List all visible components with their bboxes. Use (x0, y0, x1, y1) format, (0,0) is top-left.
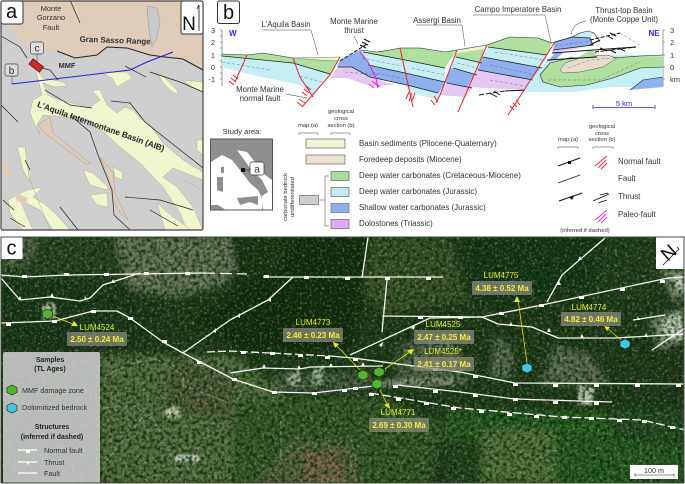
label: Thrust-top Basin: Thrust-top Basin (595, 6, 653, 15)
faults (1, 0, 203, 230)
basin sediments (8, 68, 203, 230)
fault labels: Paleo-fault (618, 210, 657, 219)
north arrow c (656, 237, 684, 269)
fault tick marks (6, 256, 681, 429)
sample LUM4525: 2.47 ± 0.25 Ma (417, 333, 471, 342)
north arrow a: N (182, 14, 196, 35)
surface and contact lines (222, 31, 663, 93)
lithology labels: Deep water carbonates (Jurassic) (359, 187, 477, 196)
sample LUM4525* (414, 347, 474, 371)
label: Assergi Basin: Assergi Basin (413, 16, 461, 25)
sample LUM4775: 4.38 ± 0.52 Ma (475, 284, 529, 293)
left axis: 3 (211, 26, 215, 35)
label: Campo Imperatore Basin (473, 5, 561, 42)
dolomitized bedrock key: Dolomitized bedrock (22, 403, 88, 412)
middle block (456, 46, 485, 55)
fold block (523, 55, 663, 92)
label: Monte Marine normal fault: normal fault (240, 94, 281, 103)
label b (218, 1, 240, 24)
panel: c aerial image (0, 236, 685, 484)
right axis: km (670, 75, 680, 84)
sample LUM4524: 2.50 ± 0.24 Ma (70, 335, 124, 344)
inset label a: a (254, 164, 260, 176)
legend: faults (558, 124, 661, 234)
label: Campo Imperatore Basin: Campo Imperatore Basin (475, 5, 561, 14)
MMF damage zone key: MMF damage zone (22, 386, 84, 395)
direction labels: W (229, 29, 237, 38)
legend: faults: cross (595, 131, 609, 137)
left axis: 0 (211, 63, 215, 72)
fault lines (1, 237, 685, 430)
sample LUM4774: 4.82 ± 0.46 Ma (564, 315, 618, 324)
study zone c (29, 59, 43, 72)
left axis: -1 (208, 75, 215, 84)
label: Monte Marine thrust (330, 17, 378, 44)
label: Assergi Basin (413, 16, 465, 46)
carbonate bedrock label: undifferentiated (290, 177, 296, 217)
samples heading: (TL Ages) (34, 366, 66, 373)
sample LUM4773 (283, 318, 368, 380)
scale bar 5 km: 5 km (616, 99, 632, 108)
label box b: b (9, 66, 15, 77)
study area map (210, 139, 272, 210)
fault labels: Fault (618, 174, 636, 183)
label b: b (223, 2, 234, 24)
legend: faults: section (b) (588, 137, 616, 143)
legend: faults: geological (589, 124, 615, 130)
fault key: Fault (44, 469, 60, 478)
structures heading: (inferred if dashed) (21, 434, 83, 441)
label: Monte Gorzano Fault: Fault (43, 23, 59, 32)
panel: b cross section (208, 1, 680, 115)
normal faults red (229, 42, 555, 115)
label: Thrust-top Basin: (Monte Coppe Unit) (590, 15, 658, 24)
panel: a map (1, 0, 203, 230)
label: Monte Gorzano Fault: Gorzano (37, 13, 65, 22)
aerial photo background (0, 236, 685, 484)
foredeep and range area (1, 1, 203, 70)
symbol: fault (558, 175, 580, 183)
right axis: 2 (670, 38, 674, 47)
sample LUM4524 (42, 309, 127, 346)
right axis: 3 (670, 26, 674, 35)
column headers (298, 109, 355, 135)
left axis (208, 26, 222, 86)
column headers: geological (328, 109, 354, 115)
label c (1, 237, 22, 260)
study area label: Study area: (223, 127, 261, 136)
scale bar 100 m: 100 m (644, 466, 664, 475)
sample LUM4525 (374, 320, 474, 377)
dashed bedding (222, 33, 640, 86)
sample LUM4774: LUM4774 (572, 303, 607, 312)
scale bar 5 km (593, 99, 655, 109)
column headers: cross (334, 116, 348, 122)
column headers: map (a) (298, 123, 318, 129)
label: L'Aquila Basin (261, 20, 318, 55)
label: L'Aquila Basin: L'Aquila Basin (261, 20, 311, 29)
label: Monte Gorzano Fault: Monte (41, 4, 61, 13)
legend: lithology (283, 109, 521, 228)
symbol: paleo-fault (595, 210, 607, 223)
thrust faults black (340, 33, 636, 97)
paleo-fault (360, 52, 380, 88)
cross section trace (12, 52, 173, 84)
label: AIB: L'Aquila Intermontane Basin (AIB) (36, 99, 166, 153)
sample LUM4771: 2.69 ± 0.30 Ma (372, 421, 426, 430)
lithology labels: Deep water carbonates (Cretaceous-Miocene) (359, 171, 521, 180)
label: Gran Sasso Range: Gran Sasso Range (79, 35, 151, 46)
right axis: 1 (670, 51, 674, 60)
legend: faults: map (a) (558, 137, 578, 143)
lithology labels: Shallow water carbonates (Jurassic) (359, 203, 486, 212)
label a: a (6, 1, 18, 23)
sample LUM4775 (472, 271, 532, 373)
thrust key: Thrust (44, 458, 64, 467)
east tilted block (487, 37, 552, 55)
right axis: 0 (670, 63, 674, 72)
lithology labels: Dolostones (Triassic) (359, 219, 433, 228)
sample LUM4525*: 2.41 ± 0.17 Ma (417, 360, 471, 369)
symbol: thrust (559, 193, 609, 203)
label: Monte Marine thrust: Monte Marine (330, 17, 378, 26)
sample LUM4524: LUM4524 (80, 323, 115, 332)
structures heading: Structures (35, 424, 69, 431)
samples heading: Samples (36, 357, 64, 364)
normal fault key: Normal fault (44, 446, 83, 455)
sample LUM4773: 2.46 ± 0.23 Ma (286, 331, 340, 340)
label box c: c (34, 44, 40, 54)
label: Monte Marine normal fault (236, 85, 307, 103)
north arrow a (181, 1, 203, 35)
sample LUM4774 (561, 303, 630, 349)
carbonate bedrock label: carbonate bedrock (283, 173, 289, 221)
fault labels: Thrust (618, 192, 641, 201)
geological layers (222, 31, 663, 100)
swatches (300, 139, 349, 228)
sample LUM4771 (369, 379, 429, 432)
north arrow c: N (657, 241, 681, 266)
thrust sheet (572, 31, 594, 38)
sample LUM4771: LUM4771 (381, 408, 416, 417)
legend: samples and structures (3, 352, 100, 483)
label a (1, 1, 23, 24)
label box b (5, 64, 18, 84)
lithology labels: Foredeep deposits (Miocene) (359, 155, 462, 164)
central block (330, 67, 395, 86)
sample LUM4525: LUM4525 (426, 320, 461, 329)
west block (222, 56, 330, 97)
symbol: normal fault (558, 156, 607, 169)
label: Thrust-top Basin (571, 6, 658, 34)
label: Monte Marine normal fault: Monte Marine (236, 85, 284, 94)
left axis: 2 (211, 38, 215, 47)
label c: c (6, 238, 16, 260)
column headers: section (b) (327, 123, 355, 129)
sample LUM4775: LUM4775 (484, 271, 519, 280)
sample LUM4773: LUM4773 (296, 318, 331, 327)
label: Monte Marine thrust: thrust (344, 26, 365, 35)
label box c (30, 42, 44, 62)
scale bar 100 m (630, 465, 678, 479)
sample LUM4525*: LUM4525* (424, 347, 462, 356)
lithology labels: Basin sediments (Pliocene-Quaternary) (359, 139, 497, 148)
fault labels: Normal fault (618, 157, 661, 166)
panel: b cross section: NE (648, 29, 660, 38)
right axis (663, 26, 680, 86)
left axis: 1 (211, 51, 215, 60)
inferred note: (inferred if dashed) (560, 228, 610, 234)
label: MMF: MMF (59, 61, 76, 70)
